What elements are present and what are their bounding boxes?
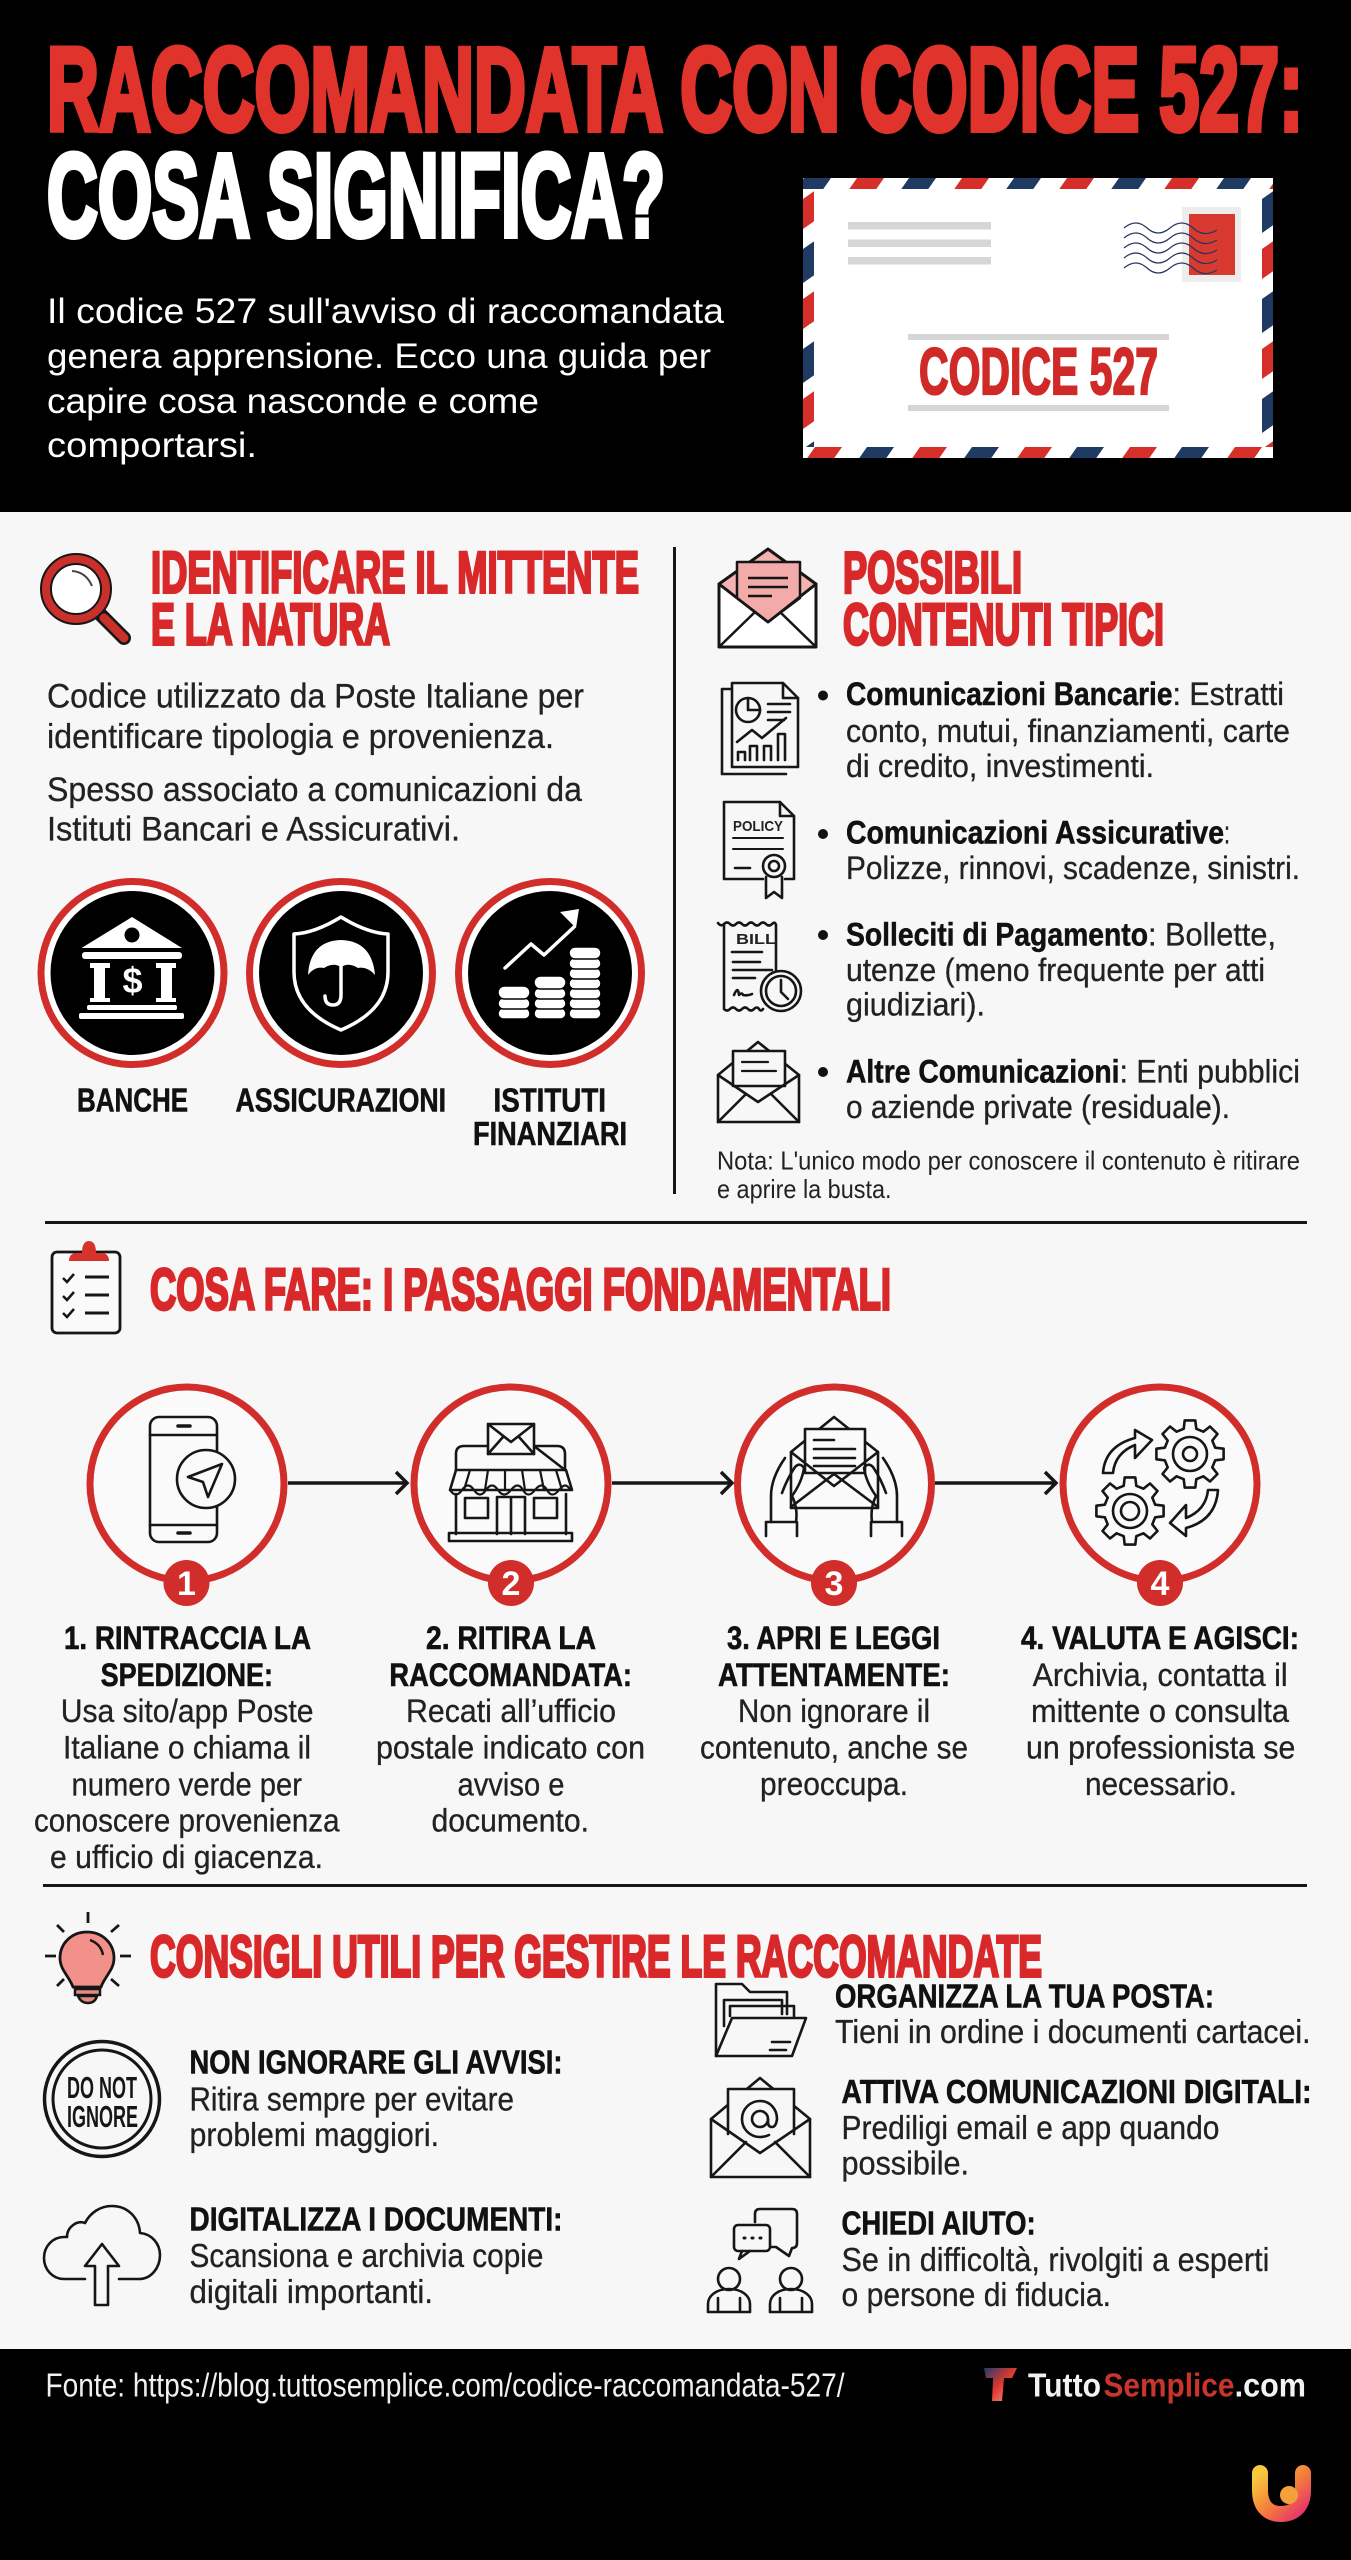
text: chiedi aiuto: CHIEDI AIUTO:: [842, 2205, 1036, 2242]
icon: people talking: [708, 2209, 812, 2312]
icon: envelope: [718, 1042, 799, 1122]
text: step 3: preoccupa.: [760, 1766, 908, 1802]
step 3: [700, 1387, 968, 1802]
text: step 3: ATTENTAMENTE:: [718, 1657, 950, 1693]
text: non ignorare: Ritira sempre per evitare: [190, 2080, 514, 2117]
step 1: [34, 1387, 340, 1875]
logo: tuttosemplice: Tutto: [1028, 2367, 1101, 2404]
text: attiva comunicazioni: Prediligi email e app quando: [842, 2109, 1219, 2146]
text: step 1: e ufficio di giacenza.: [50, 1839, 323, 1875]
panel: footer: [0, 2349, 1351, 2560]
text: digitalizza: digitali importanti.: [190, 2273, 433, 2310]
text: organizza: [835, 1977, 1311, 2050]
text: chiedi aiuto: o persone di fiducia.: [842, 2276, 1111, 2313]
bullet: [818, 1067, 828, 1077]
text block: altre comunicazioni: Altre Comunicazioni: [846, 1054, 1120, 1090]
text block: comunicazioni bancarie: [846, 676, 1290, 784]
text: attiva comunicazioni: possibile.: [842, 2144, 969, 2181]
text block: altre comunicazioni: o aziende private (residuale).: [846, 1089, 1230, 1125]
intro paragraph: [47, 292, 725, 465]
icon: do not ignore stamp: IGNORE: [67, 2099, 138, 2134]
label: ISTITUTI: [494, 1082, 606, 1118]
text: digitalizza: DIGITALIZZA I DOCUMENTI:: [190, 2200, 562, 2237]
text block: solleciti di pagamento: utenze (meno frequente per atti: [846, 952, 1265, 988]
heading: CONTENUTI TIPICI: [843, 592, 1164, 658]
icon: light bulb: [45, 1912, 131, 2003]
panel: consigli utili: [44, 1912, 1312, 2313]
number badge: 4: [1151, 1565, 1170, 1603]
text block: solleciti di pagamento: [846, 916, 1276, 1022]
number badge: [488, 1560, 534, 1606]
number badge: 2: [502, 1565, 520, 1603]
text: step 4: Archivia, contatta il: [1033, 1657, 1288, 1693]
intro paragraph: comportarsi.: [47, 426, 257, 465]
icon: airmail envelope: [803, 178, 1273, 458]
icon: bank statement: [722, 683, 798, 774]
panel: possibili contenuti: [717, 540, 1300, 1204]
icon: clipboard: [52, 1241, 120, 1333]
panel: cosa fare: [34, 1241, 1299, 1875]
text: step 2: avviso e: [458, 1766, 564, 1802]
label: FINANZIARI: [473, 1115, 627, 1152]
text: step 2: [376, 1620, 645, 1838]
text: non ignorare: problemi maggiori.: [190, 2116, 439, 2153]
number badge: 1: [177, 1565, 196, 1603]
text block: altre comunicazioni: : Enti pubblici: [1120, 1054, 1300, 1090]
icon: insurance shield: [250, 882, 432, 1064]
label: ASSICURAZIONI: [236, 1082, 446, 1118]
step 2: [376, 1387, 645, 1838]
text block: comunicazioni bancarie: Comunicazioni Bancarie: [846, 676, 1172, 712]
note: [717, 1146, 1300, 1204]
text block: comunicazioni assicurative: [846, 815, 1300, 886]
logo: tuttosemplice: Semplice: [1104, 2367, 1234, 2404]
icon: airmail envelope: CODICE 527: [919, 334, 1158, 408]
intro paragraph: capire cosa nasconde e come: [47, 382, 539, 421]
text: step 1: numero verde per: [72, 1766, 302, 1802]
logo: corner mark: [1260, 2473, 1303, 2514]
text: step 4: un professionista se: [1026, 1730, 1295, 1766]
heading: E LA NATURA: [151, 592, 390, 658]
icon: post office: [449, 1424, 572, 1541]
text: non ignorare: [190, 2043, 562, 2153]
icon: phone: [150, 1417, 235, 1542]
text: step 4: mittente o consulta: [1031, 1693, 1289, 1729]
text: chiedi aiuto: [842, 2205, 1269, 2313]
text: step 4: 4. VALUTA E AGISCI:: [1021, 1620, 1299, 1656]
heading: COSA FARE: I PASSAGGI FONDAMENTALI: [150, 1258, 891, 1322]
bullet: [818, 829, 828, 839]
number badge: [811, 1560, 857, 1606]
icon: email: [711, 2078, 810, 2177]
intro paragraph: genera apprensione. Ecco una guida per: [47, 337, 711, 376]
panel: identificare il mittente: [41, 540, 642, 1152]
text: organizza: ORGANIZZA LA TUA POSTA:: [835, 1977, 1214, 2014]
text: step 2: 2. RITIRA LA: [426, 1620, 596, 1656]
icon: policy document: POLICY: [733, 818, 783, 835]
icon: bank: $: [122, 960, 143, 1001]
heading: [843, 540, 1164, 658]
arrow: [612, 1472, 732, 1494]
text: step 1: [34, 1620, 340, 1875]
text: step 4: necessario.: [1085, 1766, 1237, 1802]
intro paragraph: Il codice 527 sull'avviso di raccomandata: [47, 292, 725, 331]
icon: folder: [716, 1984, 806, 2056]
note: Nota: L'unico modo per conoscere il contenuto è ritirare: [717, 1146, 1300, 1176]
text: step 3: Non ignorare il: [738, 1693, 930, 1729]
title line 2: COSA SIGNIFICA?: [47, 130, 665, 262]
icon: cloud upload: [44, 2206, 160, 2305]
text: step 1: SPEDIZIONE:: [101, 1657, 273, 1693]
logo: tuttosemplice: [984, 2367, 1306, 2404]
text: step 1: 1. RINTRACCIA LA: [64, 1620, 311, 1656]
arrow: [288, 1472, 407, 1494]
source text: Fonte: https://blog.tuttosemplice.com/codice-raccomandata-527/: [46, 2367, 845, 2404]
icon: bill with clock: [718, 922, 801, 1011]
text: step 2: RACCOMANDATA:: [389, 1657, 632, 1693]
text: step 3: [700, 1620, 968, 1802]
text block: solleciti di pagamento: : Bollette,: [1148, 916, 1276, 952]
step 4: [1021, 1387, 1299, 1802]
text block: comunicazioni assicurative: Polizze, rinnovi, scadenze, sinistri.: [846, 850, 1300, 886]
text: non ignorare: NON IGNORARE GLI AVVISI:: [190, 2043, 562, 2080]
icon: bank: [41, 882, 224, 1064]
text: digitalizza: [190, 2200, 562, 2310]
text: digitalizza: Scansiona e archivia copie: [190, 2237, 543, 2274]
text: step 3: 3. APRI E LEGGI: [727, 1620, 940, 1656]
icon: gears and arrows: [1096, 1420, 1224, 1545]
text block: description: [47, 678, 584, 848]
icon: do not ignore stamp: [44, 2042, 160, 2156]
panel: header: [0, 0, 1351, 512]
text block: altre comunicazioni: [846, 1054, 1300, 1125]
icon: coins and growth: [458, 882, 642, 1064]
text block: description: Istituti Bancari e Assicurativi.: [47, 810, 460, 848]
text block: comunicazioni bancarie: di credito, investimenti.: [846, 748, 1154, 784]
text: organizza: Tieni in ordine i documenti cartacei.: [835, 2013, 1311, 2050]
text block: description: identificare tipologia e provenienza.: [47, 718, 554, 756]
text block: comunicazioni bancarie: conto, mutui, finanziamenti, carte: [846, 713, 1290, 749]
logo: tuttosemplice: .com: [1235, 2367, 1306, 2404]
icon: hands opening envelope: [766, 1417, 902, 1536]
icon: bill with clock: BILL: [736, 931, 776, 948]
arrow: [935, 1472, 1056, 1494]
text: step 4: [1021, 1620, 1299, 1802]
label: BANCHE: [77, 1082, 188, 1118]
icon: open envelope with letter: [719, 549, 816, 647]
text block: comunicazioni assicurative: :: [1224, 815, 1230, 851]
text block: solleciti di pagamento: giudiziari).: [846, 986, 985, 1022]
icon: do not ignore stamp: DO NOT: [67, 2070, 137, 2105]
heading: [151, 540, 639, 658]
heading: POSSIBILI: [843, 540, 1022, 606]
number badge: [1137, 1560, 1183, 1606]
text: step 3: contenuto, anche se: [700, 1730, 968, 1766]
bullet: [818, 690, 828, 700]
icon: magnifier: [46, 559, 124, 638]
text block: solleciti di pagamento: Solleciti di Pagamento: [846, 916, 1148, 952]
heading: IDENTIFICARE IL MITTENTE: [151, 540, 639, 606]
text: step 2: documento.: [432, 1802, 589, 1838]
icon: policy document: [724, 802, 794, 898]
text block: comunicazioni bancarie: : Estratti: [1172, 676, 1284, 712]
text block: comunicazioni assicurative: Comunicazioni Assicurative: [846, 815, 1224, 851]
text: step 1: conoscere provenienza: [34, 1802, 340, 1838]
note: e aprire la busta.: [717, 1174, 892, 1204]
number badge: [164, 1560, 210, 1606]
label: [473, 1082, 627, 1152]
text: step 2: postale indicato con: [376, 1730, 645, 1766]
text: attiva comunicazioni: [842, 2073, 1312, 2181]
text: step 2: Recati all’ufficio: [406, 1693, 616, 1729]
text: step 1: Italiane o chiama il: [63, 1730, 311, 1766]
text block: description: Codice utilizzato da Poste Italiane per: [47, 678, 584, 716]
text: chiedi aiuto: Se in difficoltà, rivolgiti a esperti: [842, 2241, 1269, 2278]
text block: description: Spesso associato a comunicazioni da: [47, 771, 582, 809]
text: step 1: Usa sito/app Poste: [61, 1693, 314, 1729]
bullet: [818, 930, 828, 940]
number badge: 3: [825, 1565, 843, 1603]
